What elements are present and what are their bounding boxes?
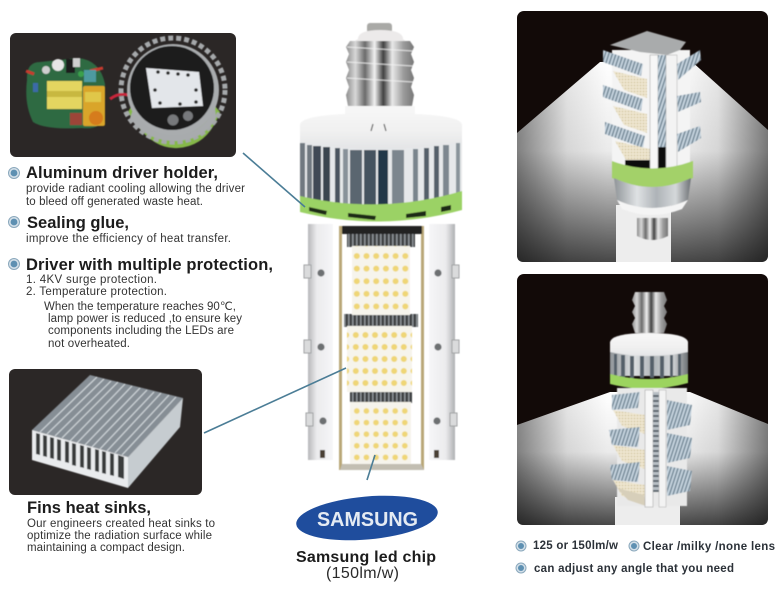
central lamp: [300, 23, 462, 470]
driver holder cap: [300, 106, 462, 150]
description: 1. 4KV surge protection.: [26, 274, 157, 286]
description: components including the LEDs are: [48, 325, 234, 337]
bullet: [8, 258, 20, 270]
cap: [610, 333, 688, 358]
description: provide radiant cooling allowing the driver: [26, 183, 245, 195]
screw: [632, 292, 667, 333]
feature note: angle: can adjust any angle that you need: [534, 563, 734, 575]
green band: [610, 374, 688, 389]
red wire: [110, 94, 134, 99]
PCB board: [26, 58, 105, 128]
description: Our engineers created heat sinks to: [27, 518, 215, 530]
feature: fins heat sinks: [27, 499, 215, 554]
side arms: [304, 224, 459, 460]
bullet: [629, 541, 639, 551]
description: maintaining a compact design.: [27, 542, 185, 554]
body and modules: [609, 388, 692, 507]
fins: [614, 178, 691, 208]
feature: aluminum driver holder: [8, 164, 245, 208]
description: to bleed off generated waste heat.: [26, 196, 203, 208]
screw: [637, 218, 668, 240]
round holder: [121, 38, 225, 148]
bullet: [8, 216, 20, 228]
description: lamp power is reduced ,to ensure key: [48, 313, 242, 325]
samsung logo: [294, 490, 440, 546]
bullet: [516, 541, 526, 551]
feature: sealing glue: [8, 214, 231, 245]
tilted LED modules: [603, 50, 701, 175]
light beam: [517, 60, 768, 262]
description: 2. Temperature protection.: [26, 286, 167, 298]
photo: PCB driver and aluminum holder: [10, 33, 236, 157]
description: improve the efficiency of heat transfer.: [26, 233, 231, 245]
description: not overheated.: [48, 338, 130, 350]
samsung chip caption: Samsung led chip: [296, 549, 436, 566]
logo oval: [294, 490, 440, 546]
LED modules: [339, 226, 424, 470]
green band: [300, 191, 462, 222]
samsung chip caption: [296, 549, 436, 582]
photo: lamp shining upright view: [517, 274, 768, 525]
feature note: lens: Clear /milky /none lens: [643, 541, 775, 553]
feature: driver protection: [8, 256, 273, 350]
description: [26, 183, 245, 208]
description: [27, 518, 215, 554]
connector lines: [204, 153, 375, 480]
lamp body: [612, 50, 690, 168]
description: optimize the radiation surface while: [27, 530, 212, 542]
top plate: [610, 31, 686, 55]
description: When the temperature reaches 90℃,: [44, 301, 236, 313]
aluminum fins: [300, 142, 462, 214]
description: [26, 274, 242, 350]
heading: Aluminum driver holder,: [26, 164, 218, 182]
heading: Driver with multiple protection,: [26, 256, 273, 274]
bullet: [8, 168, 20, 178]
feature note: efficacy: 125 or 150lm/w: [533, 540, 618, 552]
logo wordmark: SAMSUNG: [317, 509, 418, 531]
fins: [610, 352, 688, 376]
cap: [617, 200, 688, 215]
heading: Sealing glue,: [27, 214, 129, 232]
photo: lamp shining top view: [517, 11, 768, 262]
light beam: [517, 392, 768, 525]
samsung chip caption: (150lm/w): [326, 565, 399, 582]
screw base: [346, 23, 414, 106]
heading: Fins heat sinks,: [27, 499, 151, 517]
photo: heat sink fins: [9, 369, 202, 495]
bullet: [516, 563, 526, 573]
green band: [612, 161, 693, 187]
